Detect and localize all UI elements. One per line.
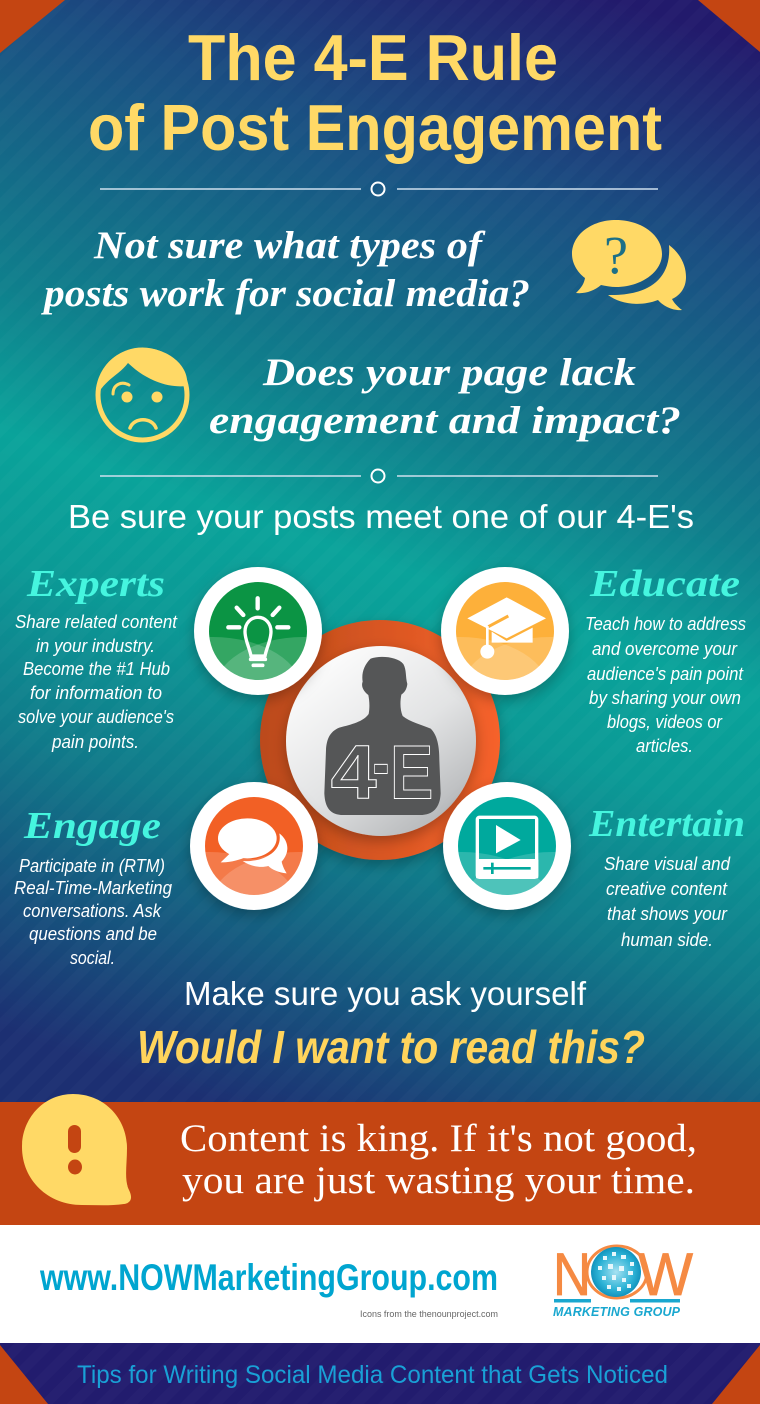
panel: experts text [15,563,178,752]
orange ring [260,620,500,860]
heading: engage: Engage [23,805,161,847]
question: lack of engagement: engagement and impact? [209,399,681,442]
text: educate body [585,614,746,756]
text: content is king: you are just wasting your time. [182,1159,695,1202]
text: educate body: by sharing your own [589,688,741,708]
text: engage body: Real-Time-Marketing [14,878,172,898]
text: engage body: questions and be [29,924,157,944]
text: educate body: Teach how to address [585,614,746,634]
text: content is king: Content is king. If it's not good, [180,1117,697,1160]
text: make sure: Make sure you ask yourself [184,975,587,1012]
panel: content is king band [0,1094,760,1225]
text: educate body: blogs, videos or [607,712,723,732]
top left corner triangle [0,0,65,53]
title: The 4-E Rule [188,21,558,94]
text: entertain body: creative content [606,879,728,899]
bottom left triangle [0,1345,48,1404]
top right corner triangle [698,0,760,52]
logo: NOW Marketing Group: N [553,1241,591,1308]
text: educate body: articles. [636,736,693,756]
text: would I want to read this: Would I want to read this? [137,1021,645,1073]
text: entertain body: human side. [621,930,713,950]
text: engage body: social. [70,948,115,968]
icon: sad face [98,348,187,440]
icon: question speech bubbles [572,220,686,310]
panel: educate text [585,563,746,756]
text: engage body: Participate in (RTM) [19,856,165,876]
question: lack of engagement: Does your page lack [262,351,637,394]
subheading: Be sure your posts meet one of our 4-E's [68,498,694,535]
bottom right triangle [712,1345,760,1404]
text: experts body: solve your audience's [18,707,174,727]
silhouette with 4-E: 4 [331,730,377,815]
title [88,21,662,164]
logo: NOW Marketing Group: W [638,1241,693,1308]
tagline: Tips for Writing Social Media Content that Gets Noticed [77,1361,668,1389]
text: experts body: in your industry. [36,636,155,656]
heading: educate: Educate [589,563,740,605]
icon: question speech bubbles: ? [604,225,628,285]
text: entertain body: that shows your [607,904,728,924]
text: engage body [14,856,172,968]
text: experts body: Become the #1 Hub [23,659,170,679]
text: educate body: audience's pain point [587,664,744,684]
icon: entertain video player [436,781,576,920]
panel: footer website band [0,1225,760,1343]
silhouette with 4-E [324,657,441,816]
text: educate body: and overcome your [592,639,738,659]
text: entertain body: Share visual and [604,854,731,874]
text: entertain body [604,854,731,950]
icon: experts lightbulb [189,566,328,706]
central diagram [260,620,500,860]
icon: educate graduation cap [434,566,574,707]
heading: entertain: Entertain [588,803,745,845]
grey disc [286,646,476,836]
heading: experts: Experts [26,563,165,605]
question: types of posts [41,224,530,315]
panel: entertain text [588,803,745,950]
silhouette with 4-E: - [373,721,389,806]
question: lack of engagement [209,351,681,442]
logo: NOW Marketing Group [553,1241,693,1319]
text: experts body: Share related content [15,612,178,632]
text: experts body [15,612,178,752]
silhouette with 4-E: E [390,731,433,816]
icon credit: Icons from the thenounproject.com [360,1309,498,1320]
panel: engage text [14,805,172,968]
question: types of posts: Not sure what types of [93,224,486,267]
text: experts body: for information to [30,683,162,703]
logo: NOW Marketing Group: MARKETING GROUP [553,1305,681,1319]
title: of Post Engagement [88,91,662,164]
text: engage body: conversations. Ask [23,901,162,921]
panel: bottom tagline band [0,1343,760,1404]
question: types of posts: posts work for social media? [41,272,530,315]
icon: engage speech bubbles [185,782,324,920]
website url: www.NOWMarketingGroup.com [39,1257,498,1298]
icon: alert bubble [22,1094,131,1205]
text: experts body: pain points. [51,732,139,752]
text: content is king [180,1117,697,1202]
